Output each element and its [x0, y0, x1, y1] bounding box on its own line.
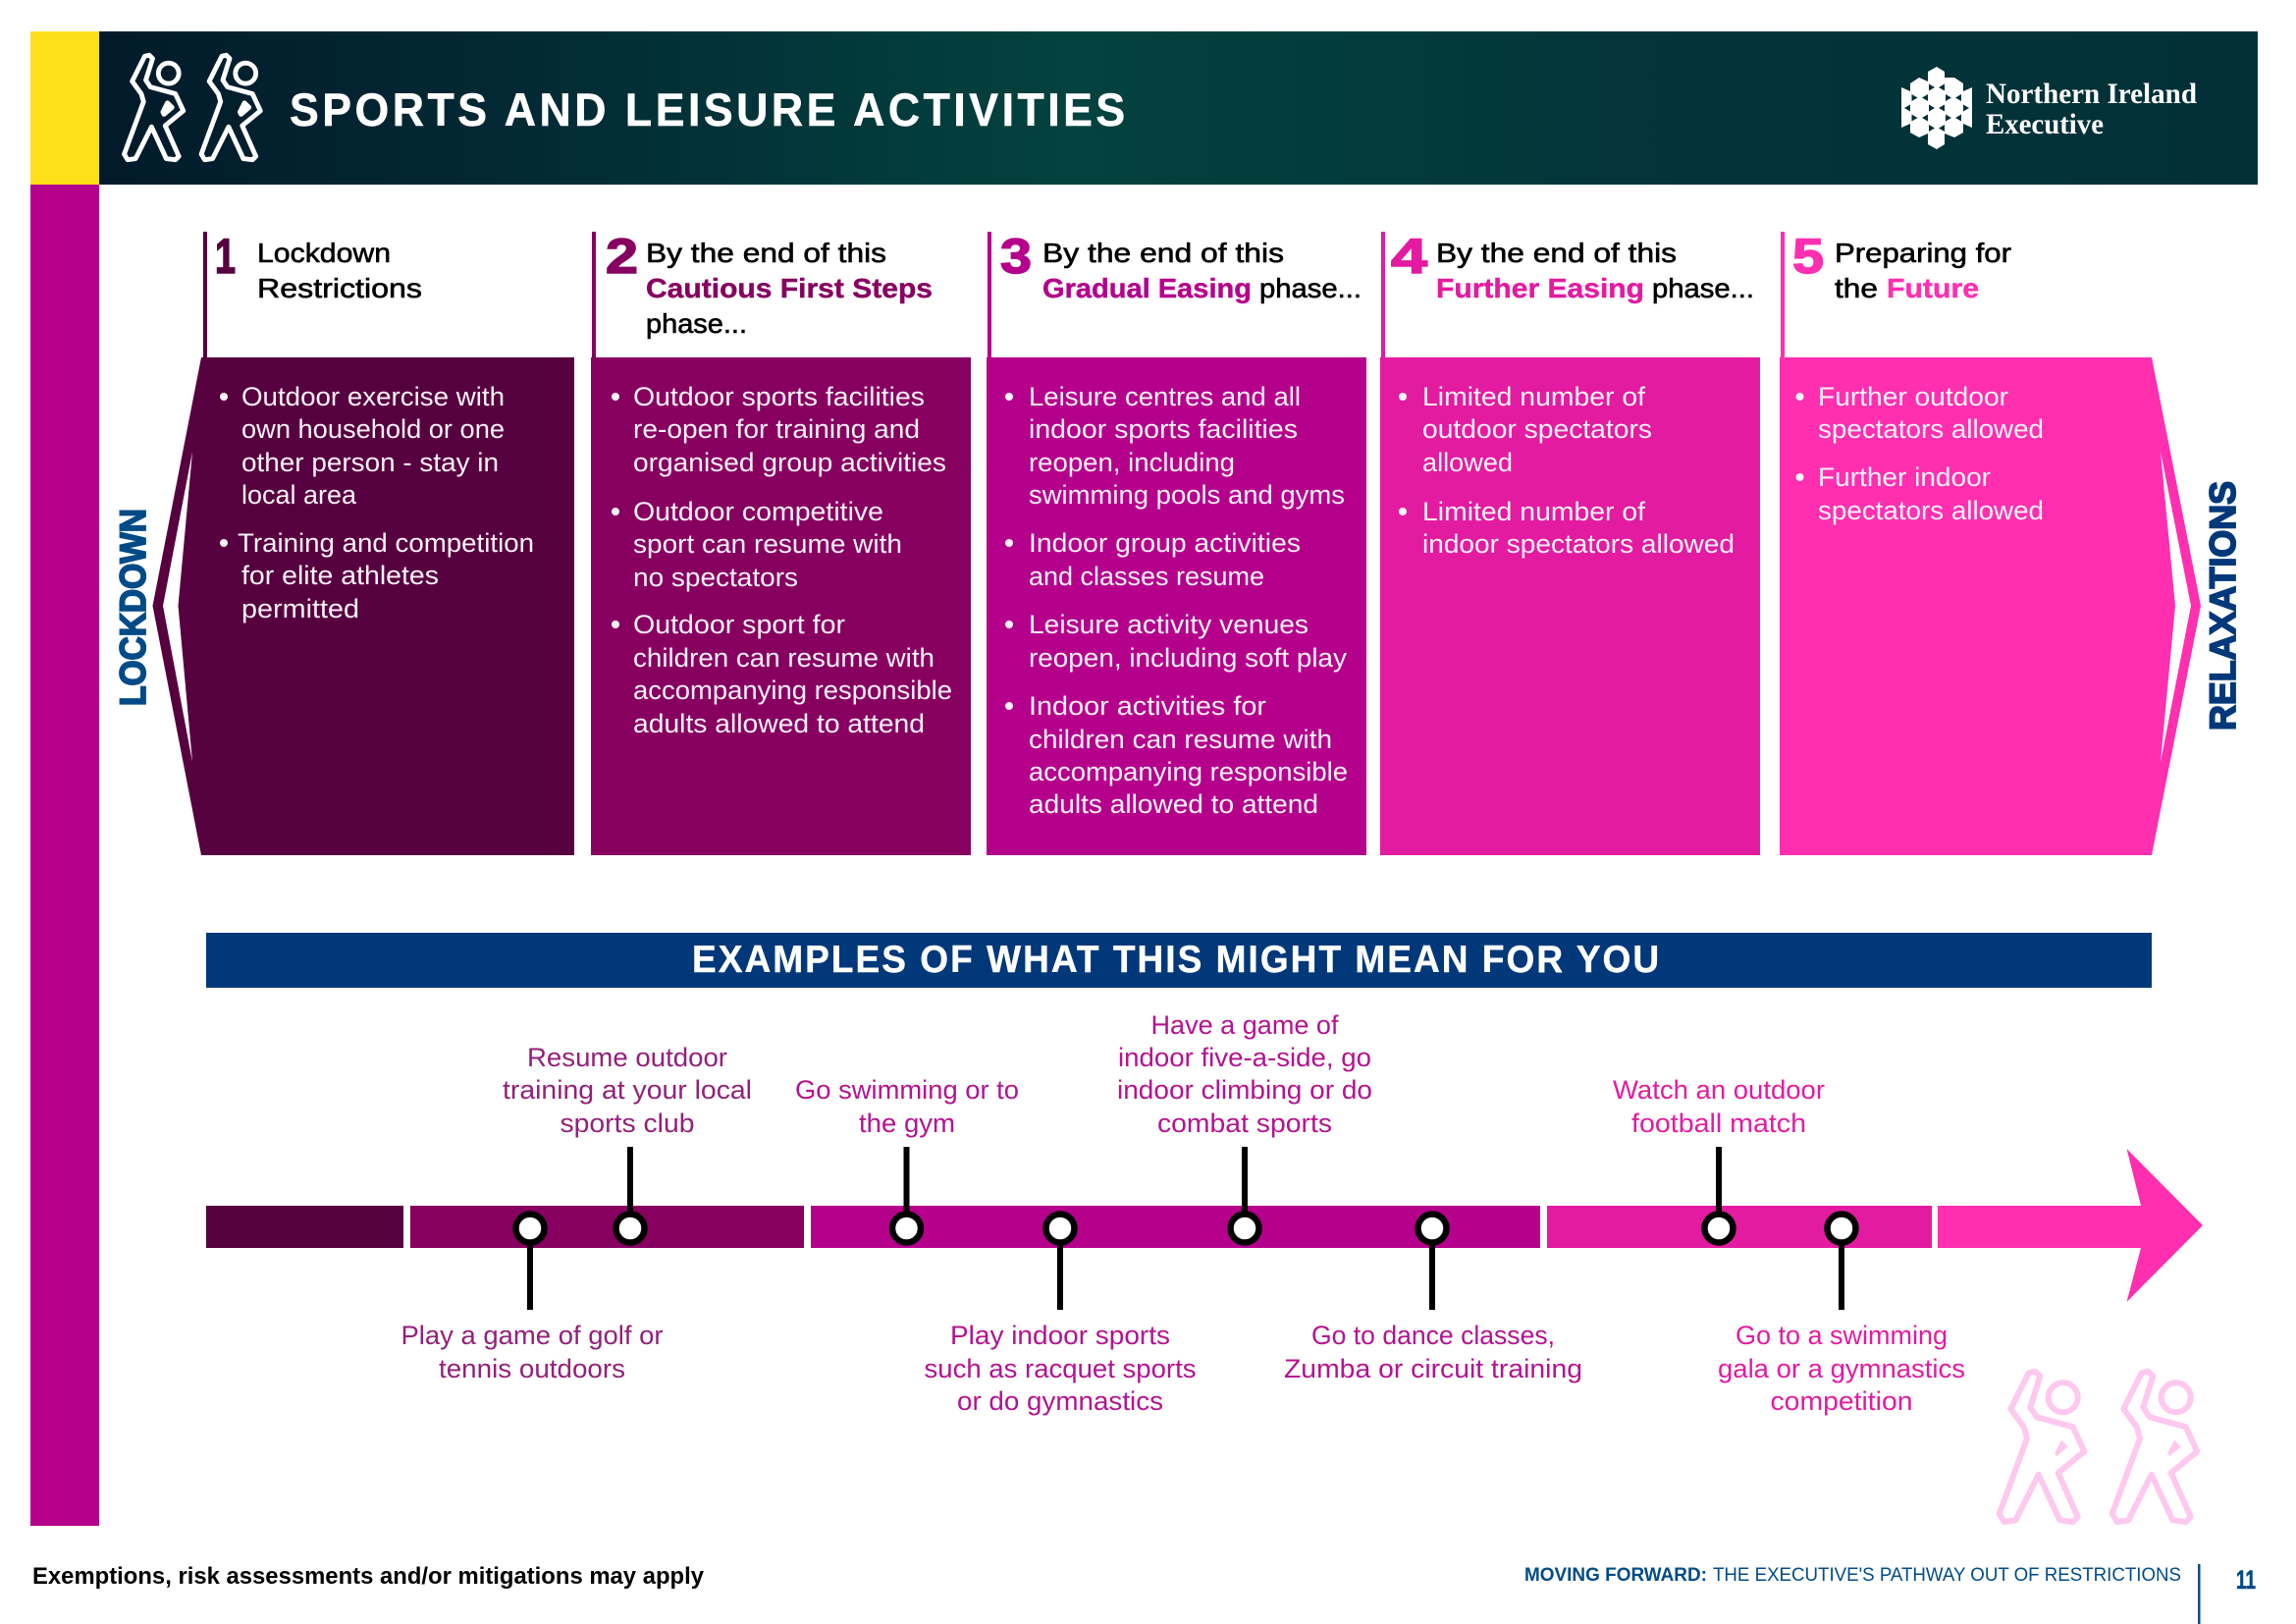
yellow corner block	[30, 31, 99, 185]
timeline arrow	[206, 1149, 2203, 1302]
example: five-a-side: combat sports	[1157, 1109, 1332, 1138]
example: dance classes: Go to dance classes,	[1311, 1321, 1555, 1350]
example: golf or tennis	[400, 1321, 664, 1383]
chevron cut 5	[2161, 452, 2191, 762]
bullets 2: children can resume with	[633, 643, 934, 673]
bullets 2: Outdoor sport for	[633, 610, 845, 639]
panel body 2	[591, 357, 971, 855]
example: golf or tennis: Play a game of golf or	[400, 1321, 664, 1350]
panel body 5	[1780, 357, 2201, 855]
bullets 2	[612, 382, 952, 738]
bullets 1: Outdoor exercise with	[241, 382, 505, 411]
example: swimming or gym	[795, 1075, 1019, 1138]
bullets 5: spectators allowed	[1818, 414, 2044, 444]
example: resume outdoor training: sports club	[560, 1109, 695, 1138]
example: football match: football match	[1631, 1109, 1806, 1138]
heading 1	[215, 229, 422, 303]
bullets 3: Indoor group activities	[1029, 528, 1301, 558]
bullets 1: other person - stay in	[241, 448, 499, 477]
bullets 1: permitted	[241, 594, 359, 623]
bullets 2: Outdoor competitive	[633, 497, 883, 526]
example: swimming gala	[1718, 1321, 1965, 1416]
panel body 4	[1380, 357, 1760, 855]
panel body 1	[153, 357, 574, 855]
bullets 3: swimming pools and gyms	[1029, 480, 1345, 510]
example: golf or tennis: tennis outdoors	[439, 1354, 625, 1383]
heading 5: the	[1835, 273, 1878, 303]
heading 3: phase...	[1259, 273, 1362, 303]
bullets 2: sport can resume with	[633, 529, 902, 559]
logo: Northern Ireland Executive: Executive	[1986, 108, 2104, 140]
example: swimming gala: Go to a swimming	[1735, 1321, 1948, 1350]
heading 5	[1792, 229, 2011, 303]
heading 5: Future	[1887, 273, 1979, 303]
banner: examples: EXAMPLES OF WHAT THIS MIGHT MEAN FOR YOU	[692, 939, 1659, 981]
example: dance classes: Zumba or circuit training	[1284, 1354, 1582, 1383]
heading 3: Gradual Easing	[1042, 273, 1252, 303]
example: swimming gala: competition	[1771, 1386, 1912, 1416]
heading 3: By the end of this	[1042, 238, 1284, 268]
bullets 1	[220, 382, 534, 623]
logo: Northern Ireland Executive	[1901, 67, 2197, 149]
bullets 2: adults allowed to attend	[633, 709, 925, 738]
bullets 3	[1005, 382, 1348, 819]
example: swimming or gym: Go swimming or to	[795, 1075, 1019, 1105]
bullets 5	[1796, 382, 2044, 525]
footer note: Exemptions, risk assessments and/or mitigations may apply	[32, 1563, 705, 1590]
bullets 3: Leisure activity venues	[1029, 610, 1308, 639]
bullets 2: organised group activities	[633, 448, 946, 477]
bullets 5: Further outdoor	[1818, 382, 2008, 411]
logo: Northern Ireland Executive: Northern Ireland	[1986, 78, 2197, 110]
bullets 3: reopen, including	[1029, 448, 1235, 477]
example: indoor sports	[925, 1321, 1196, 1416]
heading 2: By the end of this	[646, 238, 886, 268]
example: swimming gala: gala or a gymnastics	[1718, 1354, 1965, 1383]
bullets 3: reopen, including soft play	[1029, 643, 1348, 673]
example: resume outdoor training: training at your local	[503, 1075, 752, 1105]
example: football match: Watch an outdoor	[1613, 1075, 1825, 1105]
heading 3	[1000, 229, 1362, 303]
bullets 4	[1399, 382, 1735, 559]
column 5: Preparing for the Future	[1780, 229, 2201, 855]
bullets 3: indoor sports facilities	[1029, 414, 1298, 444]
banner: examples	[206, 933, 2152, 988]
magenta side strip	[30, 185, 99, 1526]
label: RELAXATIONS: RELAXATIONS	[2203, 481, 2243, 731]
bullets 3: accompanying responsible	[1029, 757, 1348, 786]
bullets 2: Outdoor sports facilities	[633, 382, 925, 411]
panel body 3	[987, 357, 1366, 855]
bullets 2: no spectators	[633, 563, 798, 592]
heading 4: 4	[1391, 229, 1427, 284]
bullets 1: own household or one	[241, 414, 505, 444]
bullets 1: Training and competition	[238, 528, 534, 558]
bullets 1: for elite athletes	[241, 561, 439, 590]
page number	[2198, 1564, 2256, 1624]
heading 4: Further Easing	[1436, 273, 1644, 303]
example: indoor sports: or do gymnastics	[957, 1386, 1163, 1416]
bullets 4: indoor spectators allowed	[1422, 529, 1735, 559]
heading 2: phase...	[646, 308, 747, 339]
column 2: Cautious First Steps	[591, 229, 971, 855]
bullets 4: outdoor spectators	[1422, 414, 1652, 444]
heading 5: 5	[1792, 229, 1824, 284]
bullets 3: Leisure centres and all	[1029, 382, 1301, 411]
heading 2: Cautious First Steps	[646, 273, 933, 303]
bullets 3: adults allowed to attend	[1029, 789, 1318, 819]
example: five-a-side: Have a game of	[1150, 1010, 1339, 1040]
bullets 4: Limited number of	[1422, 382, 1646, 411]
example: five-a-side: indoor five-a-side, go	[1118, 1043, 1371, 1072]
label: LOCKDOWN: LOCKDOWN	[113, 509, 153, 706]
example: indoor sports: Play indoor sports	[950, 1321, 1170, 1350]
heading 1: 1	[215, 229, 236, 284]
title: SPORTS AND LEISURE ACTIVITIES	[290, 84, 1125, 135]
example: swimming or gym: the gym	[859, 1109, 955, 1138]
chevron cut 1	[163, 452, 192, 762]
bullets 2: re-open for training and	[633, 414, 920, 444]
bullets 3: Indoor activities for	[1029, 691, 1266, 721]
footer document title: THE EXECUTIVE'S PATHWAY OUT OF RESTRICTIONS	[1713, 1564, 2181, 1586]
heading 4: phase...	[1652, 273, 1754, 303]
bullets 4: allowed	[1422, 448, 1513, 477]
example: resume outdoor training	[503, 1043, 752, 1138]
header band	[99, 31, 2258, 185]
icon: two exercising figures	[125, 55, 260, 160]
column 4: Further Easing	[1380, 229, 1760, 855]
heading 1: Restrictions	[257, 273, 422, 303]
example: indoor sports: such as racquet sports	[925, 1354, 1196, 1383]
bullets 3: and classes resume	[1029, 562, 1264, 591]
heading 4: By the end of this	[1436, 238, 1677, 268]
example: five-a-side	[1117, 1010, 1372, 1138]
bullets 5: spectators allowed	[1818, 496, 2044, 525]
heading 1: Lockdown	[257, 238, 391, 268]
bullets 1: local area	[241, 480, 357, 510]
bullets 3: children can resume with	[1029, 725, 1332, 754]
example: football match	[1613, 1075, 1825, 1138]
bullets 4: Limited number of	[1422, 497, 1646, 526]
heading 3: 3	[1000, 229, 1032, 284]
bullets 2: accompanying responsible	[633, 676, 952, 705]
heading 2: 2	[606, 229, 638, 284]
heading 4	[1391, 229, 1754, 303]
column 1: Lockdown Restrictions	[153, 229, 574, 855]
example: resume outdoor training: Resume outdoor	[527, 1043, 727, 1072]
icon: pale exercising figures	[2000, 1372, 2197, 1522]
heading 5: Preparing for	[1835, 238, 2011, 268]
timeline markers	[516, 1214, 1855, 1243]
example: dance classes	[1284, 1321, 1582, 1383]
timeline stems	[527, 1147, 1844, 1310]
footer document title: MOVING FORWARD:	[1524, 1564, 1707, 1586]
page number: 11	[2236, 1565, 2256, 1595]
heading 2	[606, 229, 933, 339]
example: five-a-side: indoor climbing or do	[1117, 1075, 1372, 1105]
bullets 5: Further indoor	[1818, 462, 1991, 492]
footer document title	[1524, 1564, 2181, 1586]
column 3: Gradual Easing	[987, 229, 1366, 855]
